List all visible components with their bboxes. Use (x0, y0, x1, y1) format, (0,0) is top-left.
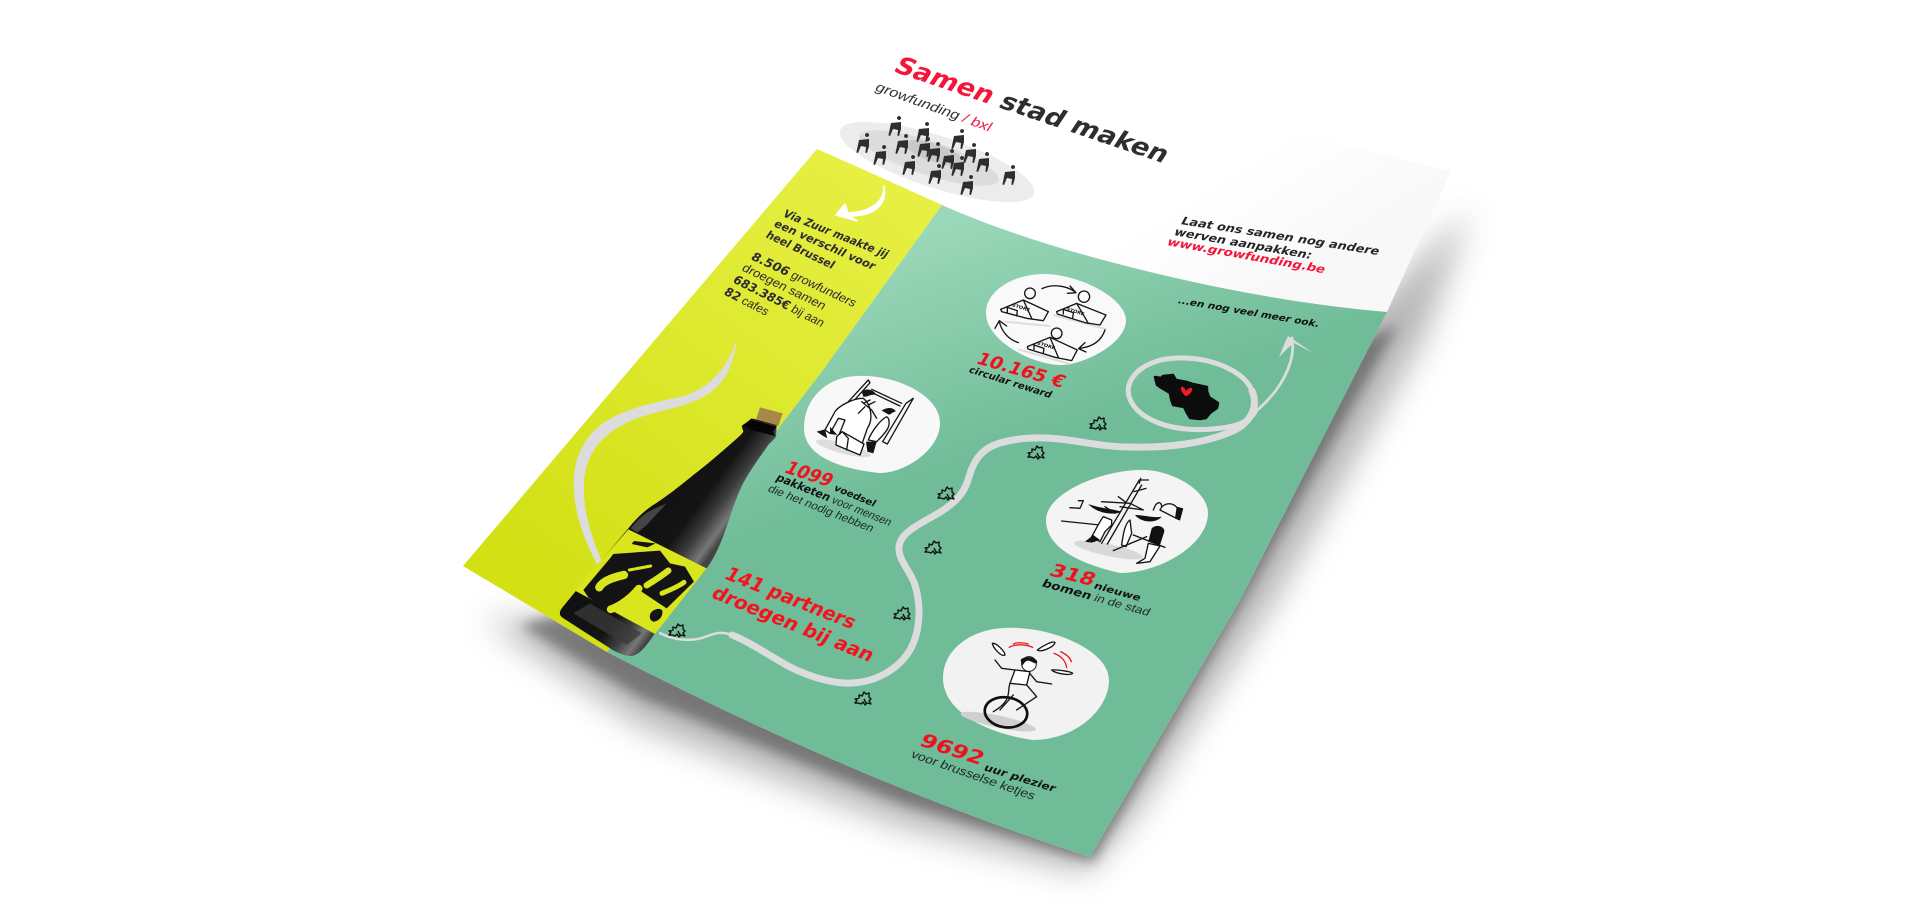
text: 141 partners: 141 partners (720, 563, 861, 633)
blob (1046, 470, 1208, 573)
curve behind bottle (574, 338, 737, 580)
text block: via Zuur: 8.506 growfunders (748, 250, 860, 310)
stat: 1099: 1099 (780, 457, 838, 491)
winding route line (660, 338, 1293, 683)
panel: trees (1046, 470, 1208, 573)
panel: yellow side (463, 149, 942, 652)
callout: growfunding: Laat ons samen nog andere (1179, 215, 1382, 258)
text block: via Zuur: heel Brussel (763, 229, 838, 271)
stat: 318: 318 (1046, 560, 1100, 590)
panel: circular reward (986, 274, 1126, 365)
callout: growfunding (1165, 215, 1382, 276)
arrow head on route (1279, 336, 1313, 357)
panel: food packages (804, 376, 940, 473)
stat: 1099: die het nodig hebben (765, 482, 877, 535)
bottle (560, 407, 783, 656)
stat: 9692: 9692 (916, 729, 989, 769)
stat: 9692: uur plezier (982, 762, 1059, 795)
stat: 1099: voedsel (831, 484, 878, 509)
text block: via Zuur: Via Zuur maakte jij (780, 208, 892, 260)
text block: via Zuur: droegen samen (739, 261, 829, 312)
crowd of people on ellipses (832, 106, 1042, 218)
bottle: body (560, 418, 777, 656)
stat: 10.165 euro: 10.165 € (973, 350, 1069, 392)
bottle: label (575, 529, 707, 634)
illustration: planting tree (1062, 478, 1183, 563)
illustration: people at van (815, 380, 913, 461)
text block: via Zuur (721, 208, 892, 330)
blob (986, 274, 1126, 365)
paper sheet (463, 33, 1451, 857)
callout: growfunding: www.growfunding.be (1165, 236, 1328, 276)
text block: via Zuur: een verschil voor (771, 218, 879, 272)
stat: 318: bomen in de stad (1040, 577, 1153, 618)
text block: via Zuur: 683.385€ bij aan (730, 273, 828, 330)
title: Samen stad maken (888, 52, 1175, 169)
illustration: unicycle juggler (960, 642, 1073, 735)
illustration: houses and arrows (995, 286, 1107, 364)
illustration: houses and arrows: STORE (1036, 341, 1056, 351)
paper shadow (485, 210, 1470, 872)
bottle: cork (756, 407, 783, 426)
text: 141 partners: droegen bij aan (707, 582, 879, 666)
bottle: label lettering (583, 541, 694, 622)
arrow: white curved (836, 186, 885, 221)
blob (804, 376, 940, 473)
bottle: shoulder highlight (631, 503, 667, 533)
stat: 318: nieuwe (1092, 581, 1143, 604)
text: en nog veel meer ook: ...en nog veel meer ook. (1176, 296, 1321, 330)
stat: 318 (1040, 560, 1153, 618)
bushes along route (669, 417, 1106, 705)
subtitle: growfunding/bxl: growfunding/ bxl (872, 81, 995, 135)
stat: 9692: voor brusselse ketjes (909, 747, 1039, 802)
panel: green main (607, 205, 1387, 857)
stat: 9692 (909, 729, 1059, 802)
illustration: houses and arrows: STORE (1011, 303, 1031, 313)
panel: juggler (943, 628, 1109, 740)
map of Brussels with heart (1155, 375, 1218, 419)
stat: 1099: pakketen voor mensen (773, 471, 895, 528)
text block: via Zuur: 82 cafes (721, 285, 772, 319)
bottle: neck collar (743, 421, 777, 436)
callout: growfunding: werven aanpakken: (1172, 226, 1315, 261)
stat: 10.165 euro: circular reward (967, 365, 1054, 401)
illustration: houses and arrows: STORE (1065, 307, 1085, 317)
bottle: lower highlight (573, 603, 642, 645)
blob (943, 628, 1109, 740)
